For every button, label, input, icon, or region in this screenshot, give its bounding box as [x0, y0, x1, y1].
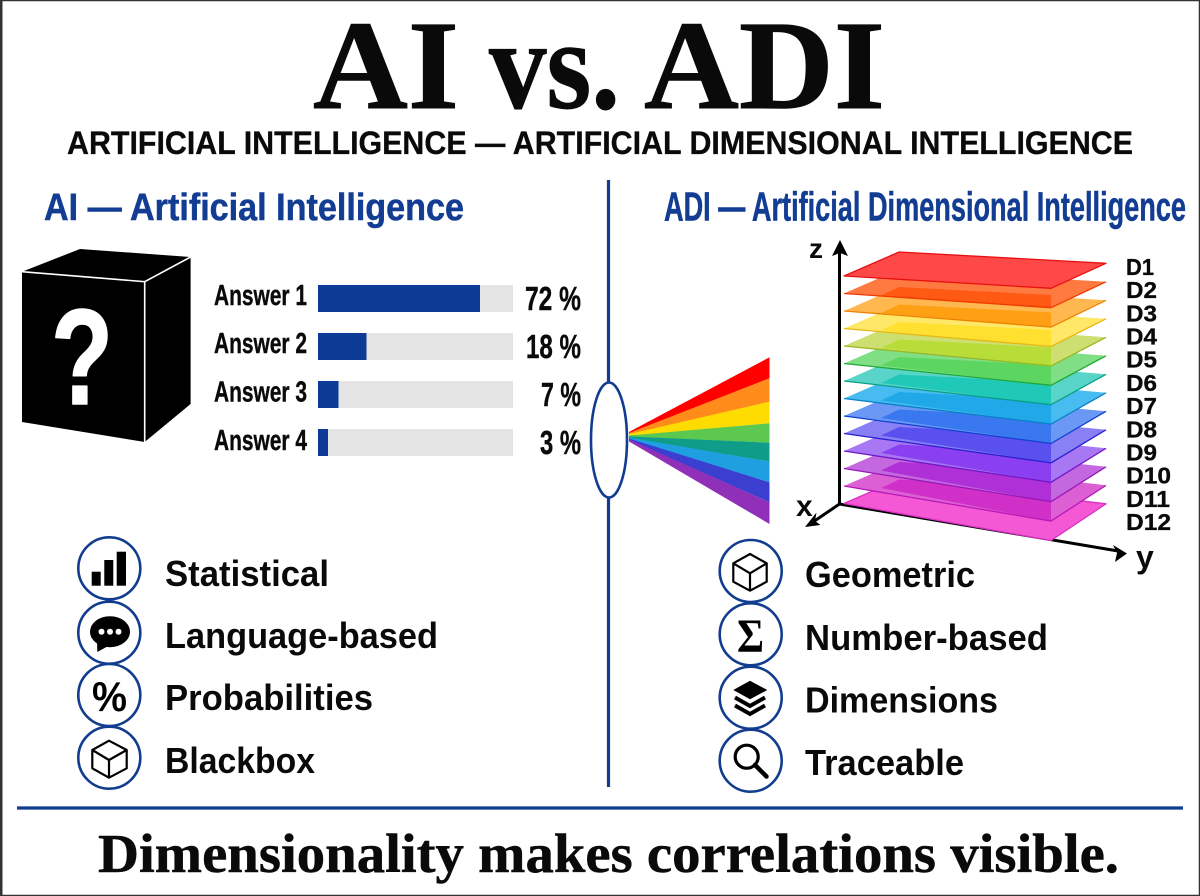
- list: ADI traits: [720, 540, 1048, 792]
- item: Statistical: [78, 537, 329, 599]
- axes: z: [809, 233, 823, 264]
- panel: AI: [22, 187, 581, 789]
- bar: answer 3: 7 %: [541, 376, 581, 413]
- plane labels: D11: [1126, 486, 1170, 512]
- plane labels: D6: [1126, 370, 1157, 396]
- plane labels: D5: [1126, 347, 1157, 373]
- item: Blackbox: Blackbox: [165, 740, 315, 781]
- planes: [844, 252, 1106, 540]
- axes: [796, 233, 1154, 575]
- icon: black box with question mark: ?: [51, 281, 113, 433]
- bar: answer 2: [214, 328, 581, 365]
- prism: lens: [591, 382, 627, 498]
- item: Traceable: [720, 730, 964, 792]
- tagline: Dimensionality makes correlations visible.: [98, 823, 1119, 884]
- title: ADI: [644, 0, 885, 136]
- heading: AI: AI — Artificial Intelligence: [44, 187, 464, 229]
- item: Number-based: [720, 603, 1048, 665]
- panel: ADI: [664, 184, 1186, 792]
- item: Dimensions: Dimensions: [805, 680, 998, 720]
- chart: stacked dimension planes: [796, 233, 1171, 575]
- axes: y: [1136, 539, 1154, 575]
- item: Language-based: [78, 602, 438, 664]
- item: Probabilities: Probabilities: [165, 677, 373, 718]
- center divider: [607, 180, 610, 787]
- item: Number-based: Number-based: [805, 617, 1048, 658]
- plane labels: D9: [1126, 439, 1157, 465]
- prism: rainbow fan: [629, 357, 770, 524]
- item: Geometric: [720, 540, 975, 602]
- bar: answer 1: [214, 280, 581, 317]
- bar: answer 2: 18 %: [526, 328, 581, 365]
- item: Number-based: Σ: [737, 610, 764, 663]
- bar: answer 3: [214, 376, 581, 413]
- title: vs.: [489, 0, 620, 136]
- bar: answer 3: Answer 3: [214, 376, 307, 408]
- bar: answer 4: [214, 424, 581, 461]
- item: Statistical: Statistical: [165, 553, 329, 594]
- plane labels: D10: [1126, 463, 1171, 489]
- item: Language-based: Language-based: [165, 615, 438, 656]
- plane labels: D4: [1126, 324, 1157, 350]
- title: [313, 0, 885, 136]
- plane labels: D3: [1126, 300, 1157, 326]
- item: Blackbox: [78, 727, 315, 789]
- bar: answer 1: 72 %: [525, 280, 581, 317]
- plane labels: D8: [1126, 416, 1157, 442]
- bar chart: answers: [214, 280, 581, 461]
- list: AI traits: [78, 537, 438, 789]
- bar: answer 1: Answer 1: [214, 280, 307, 312]
- plane labels: [1126, 254, 1171, 535]
- bottom rule: [17, 806, 1183, 810]
- plane labels: D7: [1126, 393, 1157, 419]
- plane labels: D1: [1126, 254, 1154, 280]
- item: Traceable: Traceable: [805, 742, 964, 783]
- item: Geometric: Geometric: [805, 554, 975, 595]
- item: Probabilities: [78, 664, 373, 726]
- title: AI: [313, 0, 459, 136]
- bar: answer 4: Answer 4: [214, 425, 307, 457]
- subtitle: ARTIFICIAL INTELLIGENCE — ARTIFICIAL DIMENSIONAL INTELLIGENCE: [67, 125, 1133, 161]
- axes: x: [796, 490, 813, 523]
- plane labels: D12: [1126, 509, 1171, 535]
- bar: answer 4: 3 %: [540, 424, 581, 461]
- bar: answer 2: Answer 2: [214, 328, 307, 360]
- item: Dimensions: [720, 667, 998, 729]
- icon: black box with question mark: [22, 249, 191, 442]
- item: Probabilities: %: [92, 673, 127, 720]
- plane labels: D2: [1126, 277, 1157, 303]
